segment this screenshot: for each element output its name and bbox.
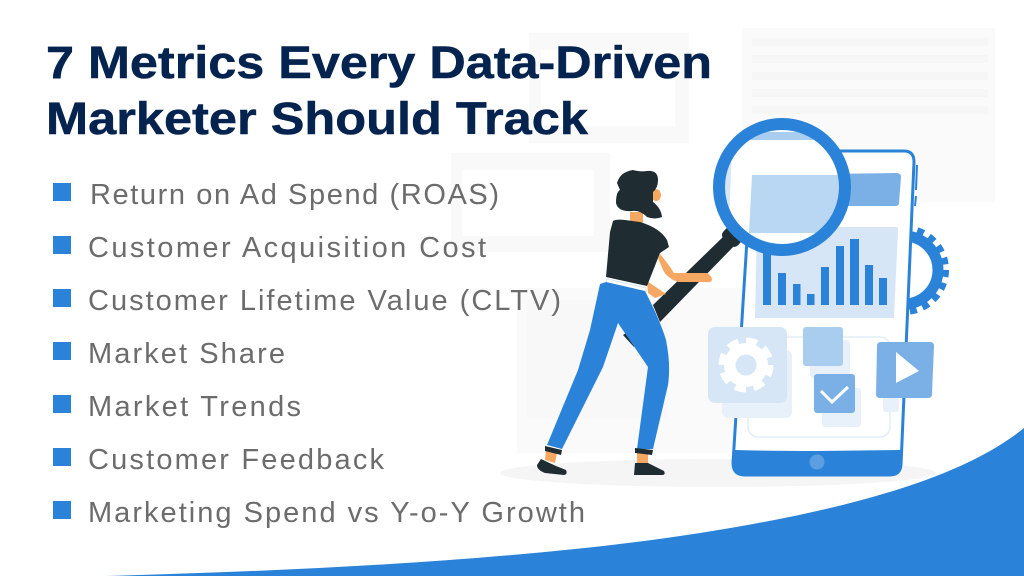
ground shadow xyxy=(500,459,936,487)
item: marketing spend: Marketing Spend vs Y-o-Y Growth xyxy=(88,497,585,529)
neck xyxy=(630,212,643,224)
lower content outline xyxy=(748,337,890,437)
near arm xyxy=(658,254,712,282)
metrics list xyxy=(53,179,585,529)
background ghost panels xyxy=(451,28,995,453)
icon: check tile xyxy=(814,374,861,427)
hair xyxy=(616,170,662,218)
face xyxy=(651,189,661,201)
phone side buttons xyxy=(915,165,917,206)
item: lifetime value: Customer Lifetime Value (CLTV) xyxy=(88,285,561,317)
item: market share: Market Share xyxy=(88,338,285,370)
magnifier lens xyxy=(718,120,860,250)
phone bottom band xyxy=(733,450,901,475)
far arm xyxy=(647,281,666,298)
icon: settings tile xyxy=(708,327,792,418)
title: 7 Metrics Every Data-Driven xyxy=(46,37,712,88)
bar chart xyxy=(763,239,887,305)
magnifier handle xyxy=(623,225,744,347)
chart panel xyxy=(755,227,898,318)
person xyxy=(537,170,712,475)
item: customer feedback: Customer Feedback xyxy=(88,444,384,476)
right shoe xyxy=(634,463,665,475)
belt xyxy=(606,279,646,292)
phone home button xyxy=(810,454,824,470)
icon: gear behind phone xyxy=(862,228,946,312)
bottom blue swoosh xyxy=(105,428,1024,576)
right cuff xyxy=(635,448,653,455)
left cuff xyxy=(545,446,562,455)
phone xyxy=(733,151,917,475)
header bar xyxy=(752,173,901,206)
left ankle xyxy=(545,450,557,463)
shirt xyxy=(606,220,669,286)
icon: light square tile xyxy=(803,327,850,378)
item: market trends: Market Trends xyxy=(88,391,301,423)
jeans xyxy=(547,282,669,449)
title xyxy=(46,37,712,144)
title: Marketer Should Track xyxy=(46,93,589,144)
icon: play tile xyxy=(876,342,934,412)
lens interior xyxy=(725,132,839,244)
right ankle xyxy=(637,453,648,464)
item: acquisition cost: Customer Acquisition Cost xyxy=(88,232,486,264)
item: ROAS: Return on Ad Spend (ROAS) xyxy=(90,179,499,211)
lens ring xyxy=(719,124,845,250)
left shoe xyxy=(537,459,567,475)
